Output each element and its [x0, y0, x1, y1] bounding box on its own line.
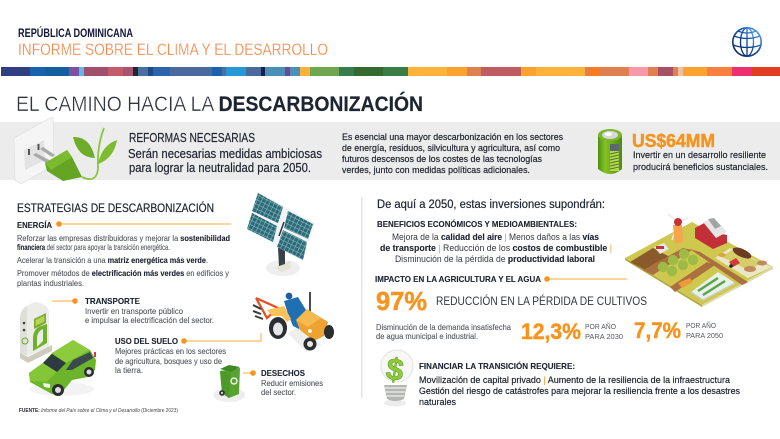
header — [18, 27, 328, 59]
transport section — [52, 296, 214, 325]
energy section: Promover métodos de electrificación más verdes en edificios y — [17, 268, 230, 278]
agriculture and water heading: IMPACTO EN LA AGRICULTURA Y EL AGUA — [375, 274, 541, 284]
energy section — [17, 220, 231, 288]
energy section: Acelerar la transición a una matriz energética más verde. — [17, 255, 208, 265]
waste section: DESECHOS — [261, 368, 305, 378]
financing block: FINANCIAR LA TRANSICIÓN REQUIERE: — [419, 360, 575, 371]
decarbonization paragraph — [342, 132, 563, 175]
land use section — [115, 333, 261, 375]
transport section: Invertir en transporte público — [85, 306, 183, 316]
water demand stats: de agua municipal e industrial. — [376, 331, 478, 341]
transport section: TRANSPORTE — [85, 296, 140, 306]
panel: investment outcomes — [361, 197, 773, 407]
financing block: Gestión del riesgo de catástrofes para mejorar la resiliencia frente a los desastres — [419, 386, 740, 396]
color stripe — [1, 67, 780, 76]
financing block — [419, 360, 740, 407]
crop loss stat — [376, 286, 647, 316]
icon: isometric farm — [625, 214, 773, 307]
decarbonization paragraph: Es esencial una mayor descarbonización en los sectores — [342, 132, 563, 142]
water demand stats: PARA 2030 — [585, 332, 623, 341]
financing block: Movilización de capital privado | Aumento de la resiliencia de la infraestructura — [419, 375, 731, 385]
water demand stats: Disminución de la demanda insatisfecha — [376, 322, 511, 332]
benefits block: de transporte | Reducción de los costos de combustible | — [380, 243, 612, 253]
decarbonization paragraph: verdes, junto con medidas políticas adicionales. — [342, 165, 530, 175]
water demand stats: 7,7% — [634, 318, 681, 343]
energy section: ENERGÍA — [17, 220, 52, 230]
land use section: Mejores prácticas en los sectores — [115, 346, 226, 356]
land use section: la tierra. — [115, 365, 143, 375]
icon: money light bulb: $ — [384, 351, 406, 388]
water demand stats — [376, 318, 723, 344]
icon: solar panel — [247, 192, 315, 276]
investment text: producirá beneficios sustanciales. — [633, 162, 768, 172]
land use section: de agricultura, bosques y uso de — [115, 356, 222, 366]
icon: green plug and leaves — [14, 117, 117, 184]
icon: battery — [598, 129, 622, 174]
outcomes heading: De aquí a 2050, estas inversiones supondrán: — [377, 199, 605, 211]
report title: INFORME SOBRE EL CLIMA Y EL DESARROLLO — [18, 41, 328, 59]
reforms text: para lograr la neutralidad para 2050. — [129, 161, 311, 175]
investment text: Invertir en un desarrollo resiliente — [633, 150, 766, 160]
icon: green car — [29, 340, 96, 396]
decarbonization paragraph: futuros descensos de los costes de las tecnologías — [342, 154, 542, 164]
energy section: plantas industriales. — [17, 278, 84, 288]
waste section — [243, 368, 323, 397]
country label: REPÚBLICA DOMINICANA — [18, 27, 133, 40]
financing block: naturales — [419, 397, 456, 407]
icon: money light bulb — [381, 350, 413, 406]
water demand stats: PARA 2050 — [686, 331, 723, 340]
reforms text — [128, 147, 322, 175]
crop loss stat: 97% — [376, 286, 427, 316]
energy section: financiera del sector para apoyar la transición energética. — [17, 242, 170, 252]
waste section: Reducir emisiones — [261, 378, 323, 388]
icon: World Bank globe — [733, 28, 761, 56]
crop loss stat: REDUCCIÓN EN LA PÉRDIDA DE CULTIVOS — [436, 295, 647, 308]
investment figure: US$64MM — [632, 130, 715, 151]
water demand stats: POR AÑO — [686, 321, 716, 330]
transport section: e impulsar la electrificación del sector. — [85, 315, 214, 325]
main title: EL CAMINO HACIA LA DESCARBONIZACIÓN — [16, 92, 423, 116]
investment text — [633, 150, 768, 172]
benefits block — [377, 218, 612, 264]
icon: recycling bin — [213, 365, 245, 402]
water demand stats: 12,3% — [521, 319, 581, 344]
panel: decarbonization strategies — [17, 192, 334, 414]
energy section: Reforzar las empresas distribuidoras y mejorar la sostenibilidad — [17, 233, 230, 243]
water demand stats: POR AÑO — [585, 322, 616, 331]
icon: tractor — [253, 292, 334, 352]
benefits block: Mejora de la calidad del aire | Menos daños a las vías — [392, 232, 599, 242]
source note: FUENTE: Informe del País sobre el Clima y el Desarrollo (Diciembre 2023) — [19, 408, 178, 414]
reforms text: Serán necesarias medidas ambiciosas — [128, 147, 322, 161]
strategies heading: ESTRATEGIAS DE DESCARBONIZACIÓN — [17, 202, 214, 215]
panel: necessary reforms band — [0, 117, 780, 184]
waste section: del sector. — [261, 387, 296, 397]
benefits block: Disminución de la pérdida de productividad laboral — [395, 254, 595, 264]
reforms heading: REFORMAS NECESARIAS — [129, 131, 255, 145]
decarbonization paragraph: de energía, residuos, silvicultura y agricultura, así como — [342, 143, 560, 153]
icon: charging station — [20, 302, 52, 363]
land use section: USO DEL SUELO — [115, 336, 178, 346]
benefits block: BENEFICIOS ECONÓMICOS Y MEDIOAMBIENTALES: — [377, 218, 577, 229]
